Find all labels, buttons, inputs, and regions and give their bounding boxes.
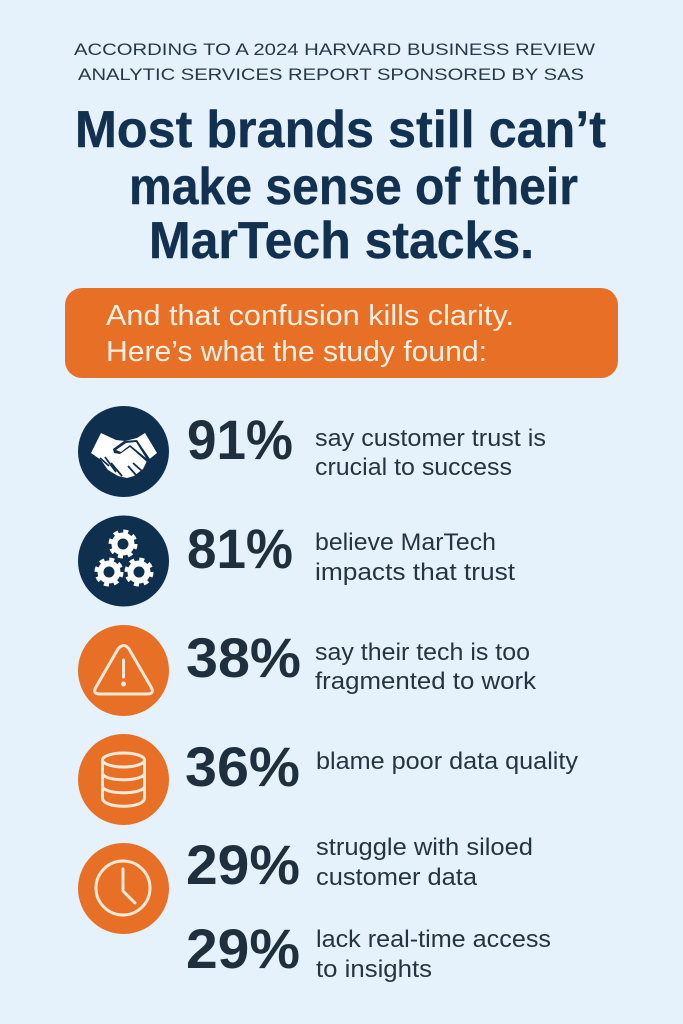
title (75, 101, 606, 270)
stat: 91%: crucial to success (315, 454, 512, 481)
stat: 38%: say their tech is too (315, 639, 530, 666)
stat: 38%: fragmented to work (315, 668, 537, 695)
icon: gears (78, 516, 169, 606)
title: Most brands still can’t (75, 101, 606, 159)
stat: 91%: say customer trust is (315, 425, 546, 452)
stat: 29% siloed (186, 833, 533, 896)
stat: 29% real-time: to insights (316, 956, 432, 983)
stat: 29% real-time: lack real-time access (316, 926, 551, 953)
title: MarTech stacks. (149, 212, 534, 270)
stat: 29% siloed: customer data (316, 864, 478, 891)
title: make sense of their (129, 158, 578, 216)
icon: handshake (78, 406, 169, 497)
stat: 36% (185, 735, 578, 798)
stat: 29% siloed: 29% (186, 833, 300, 896)
stat: 81% (187, 517, 515, 586)
stat: 36%: 36% (185, 735, 300, 798)
stat: 38%: 38% (186, 626, 301, 689)
stat: 38% (186, 626, 537, 695)
icon: clock (78, 843, 169, 934)
stat: 91% (187, 408, 546, 481)
stat: 81%: impacts that trust (315, 559, 515, 586)
stat: 29% real-time: 29% (186, 917, 300, 980)
source line: ANALYTIC SERVICES REPORT SPONSORED BY SAS (78, 65, 584, 84)
stat: 36%: blame poor data quality (316, 748, 578, 775)
source line (74, 40, 595, 84)
icon: warning triangle (78, 625, 169, 716)
callout banner: Here’s what the study found: (106, 336, 487, 368)
stat: 29% siloed: struggle with siloed (316, 834, 533, 861)
icon: database (78, 734, 169, 825)
stat: 91%: 91% (187, 408, 293, 471)
stat: 29% real-time (186, 917, 551, 983)
callout banner (65, 288, 618, 378)
stat: 81%: believe MarTech (315, 529, 496, 556)
stat: 81%: 81% (187, 517, 293, 580)
callout banner: And that confusion kills clarity. (106, 300, 514, 332)
source line: ACCORDING TO A 2024 HARVARD BUSINESS REVIEW (74, 40, 595, 59)
